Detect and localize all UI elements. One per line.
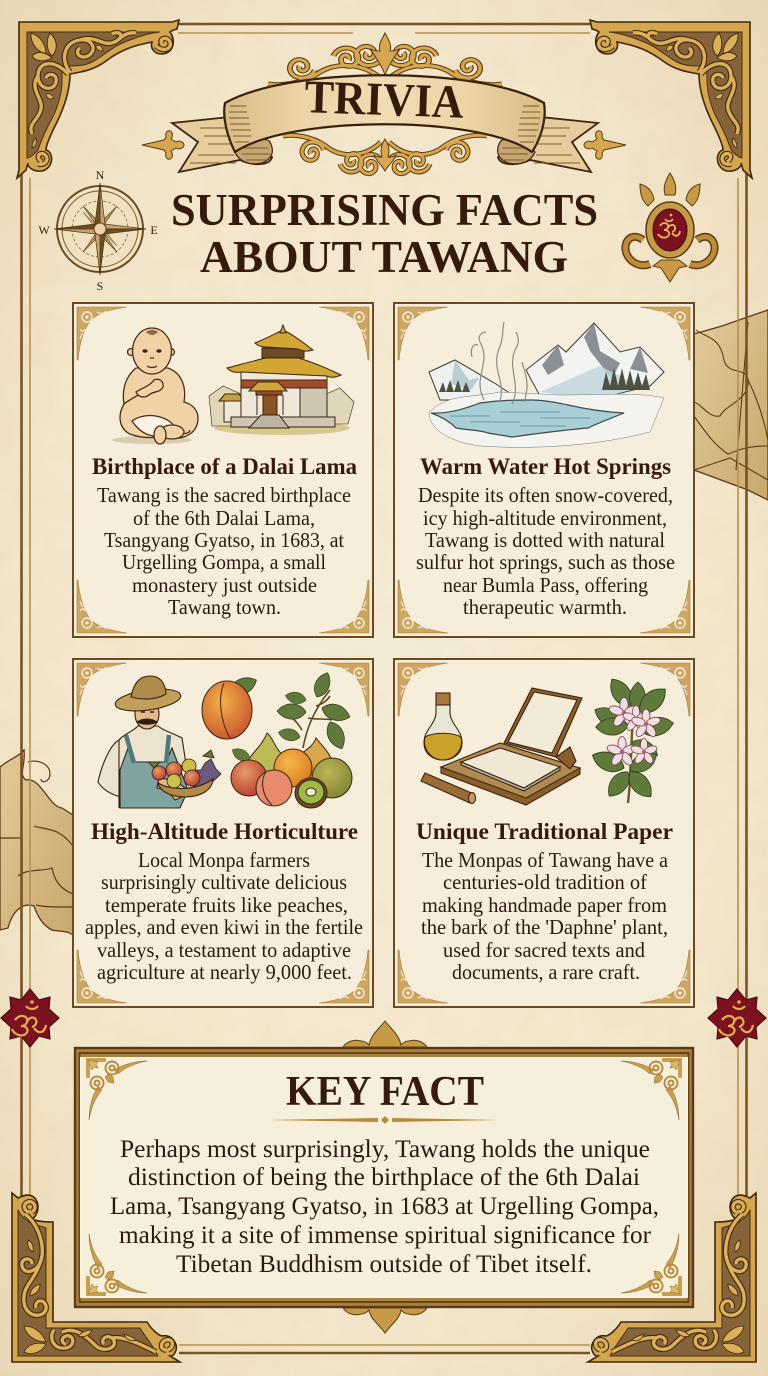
illustration: daphne plant: [589, 674, 675, 803]
illustration: baby: [112, 328, 198, 444]
illustration: fruits: [202, 670, 352, 808]
card body text: sulfur hot springs, such as those: [416, 550, 675, 574]
corner ornament: bottom right: [588, 1193, 756, 1362]
card body text: Local Monpa farmers: [138, 848, 310, 872]
main title: [171, 185, 598, 282]
card body text: centuries-old tradition of: [443, 870, 647, 894]
card body text: [85, 848, 363, 984]
card body text: Despite its often snow-covered,: [418, 483, 673, 507]
card heading: Warm Water Hot Springs: [420, 454, 671, 480]
illustration: paper press and roller: [421, 688, 582, 805]
card body text: near Bumla Pass, offering: [443, 573, 648, 597]
icon: compass rose: [38, 168, 158, 293]
illustration: mountains and hot spring: [429, 322, 664, 447]
card body text: agriculture at nearly 9,000 feet.: [97, 960, 352, 984]
corner ornament: top left: [17, 20, 179, 178]
card body text: icy high-altitude environment,: [423, 506, 667, 530]
card body text: making handmade paper from: [422, 893, 667, 917]
card body text: Tawang is dotted with natural: [425, 528, 665, 552]
illustration: farmer with fruit basket: [98, 676, 221, 808]
key fact body text: distinction of being the birthplace of the 6th Dalai: [128, 1164, 640, 1191]
map: right edge: [694, 310, 768, 500]
card heading: High-Altitude Horticulture: [91, 819, 358, 845]
key fact top ornament: [343, 1021, 427, 1047]
card body text: used for sacred texts and: [443, 938, 645, 962]
banner title: TRIVIA: TRIVIA: [304, 71, 464, 129]
corner ornament: bottom left: [12, 1193, 180, 1362]
card heading: Birthplace of a Dalai Lama: [92, 454, 357, 480]
card body text: Tsangyang Gyatso, in 1683, at: [104, 528, 344, 552]
card body text: surprisingly cultivate delicious: [101, 870, 347, 894]
key fact body text: making it a site of immense spiritual significance for: [119, 1222, 652, 1249]
banner left fleur: [142, 131, 184, 159]
card body text: valleys, a testament to adaptive: [97, 938, 351, 962]
panel: warm water hot springs: [394, 303, 694, 637]
key fact body text: Lama, Tsangyang Gyatso, in 1683 at Urgelling Gompa,: [110, 1193, 659, 1220]
card body text: [416, 483, 675, 619]
card body text: documents, a rare craft.: [452, 960, 640, 984]
panel: unique traditional paper: [394, 659, 694, 1007]
icon: compass rose: S: [97, 279, 103, 293]
card body text: [421, 848, 669, 984]
icon: compass rose: E: [150, 223, 158, 237]
icon: compass rose: W: [38, 223, 50, 237]
card body text: Urgelling Gompa, a small: [122, 550, 326, 574]
ribbon tails: [172, 117, 598, 172]
card heading: Unique Traditional Paper: [416, 819, 673, 845]
panel: key fact: [75, 1021, 693, 1333]
trivia banner: [142, 33, 626, 176]
banner bottom flourish: [283, 135, 487, 176]
card body text: apples, and even kiwi in the fertile: [85, 915, 363, 939]
ribbon body: [224, 75, 545, 152]
icon: om emblem: [625, 173, 715, 282]
map: left edge: [0, 750, 73, 935]
key fact body text: Tibetan Buddhism outside of Tibet itself.: [176, 1251, 592, 1278]
panel: high-altitude horticulture: [73, 659, 373, 1007]
icon: compass rose: N: [96, 168, 105, 182]
card body text: Tawang town.: [168, 595, 281, 619]
card body text: temperate fruits like peaches,: [105, 893, 348, 917]
banner right fleur: [584, 131, 626, 159]
card body text: [97, 483, 351, 619]
key fact body text: Perhaps most surprisingly, Tawang holds the unique: [120, 1136, 650, 1163]
key fact divider: [268, 1116, 500, 1124]
main title: ABOUT TAWANG: [200, 232, 568, 282]
corner ornament: top right: [590, 20, 752, 178]
panel: birthplace of a Dalai Lama: [73, 303, 373, 637]
illustration: monastery: [209, 325, 354, 435]
card body text: The Monpas of Tawang have a: [422, 848, 669, 872]
card body text: monastery just outside: [132, 573, 317, 597]
key fact bottom ornament: [343, 1308, 427, 1333]
main title: SURPRISING FACTS: [171, 185, 598, 235]
lotus om medallion: right: [708, 989, 766, 1047]
banner top flourish: [268, 33, 502, 85]
card body text: Tawang is the sacred birthplace: [97, 483, 351, 507]
lotus om medallion: left: [1, 989, 59, 1047]
illustration: oil bottle: [424, 693, 462, 760]
key fact heading: KEY FACT: [286, 1069, 484, 1115]
card body text: the bark of the 'Daphne' plant,: [421, 915, 668, 939]
card body text: of the 6th Dalai Lama,: [133, 506, 315, 530]
card body text: therapeutic warmth.: [463, 595, 627, 619]
key fact body text: [110, 1136, 659, 1278]
